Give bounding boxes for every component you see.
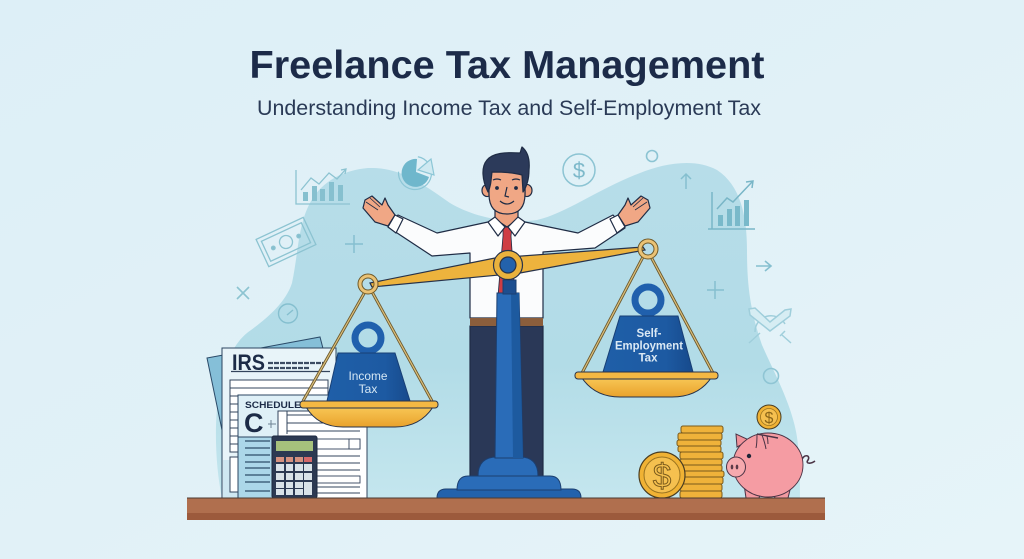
right pan [575, 372, 718, 397]
title: Freelance Tax Management [250, 44, 765, 87]
calculator [272, 436, 317, 498]
trousers [470, 326, 543, 478]
right cuff [610, 215, 625, 233]
left weight: income tax [327, 325, 410, 401]
dome [478, 457, 538, 476]
icon: target check [749, 308, 791, 343]
icon: plus right [707, 281, 724, 299]
icon: line and bar chart right [708, 181, 755, 229]
ear [736, 434, 749, 447]
left fingers [366, 198, 380, 210]
icon: clock circle [278, 304, 298, 323]
middle plinth [457, 476, 561, 490]
right weight: self-employment tax [603, 287, 693, 372]
blue sheet [238, 437, 273, 498]
right weight: self-employment tax: Employment [615, 340, 683, 352]
left ring [360, 276, 376, 292]
face [489, 170, 525, 214]
Schedule C form: SCHEDULE C [245, 400, 311, 411]
icon: small circle top [646, 150, 658, 162]
left pan [300, 401, 438, 427]
icon: plus left [345, 235, 363, 253]
subtitle: Understanding Income Tax and Self-Employment Tax [257, 96, 761, 120]
businessman [363, 147, 650, 478]
icon: pie chart [396, 154, 434, 192]
icon: small circle right [764, 368, 778, 384]
small dollar coin: $ [765, 410, 774, 427]
beam bar [370, 247, 645, 287]
small dollar coin [757, 405, 781, 429]
pole [495, 293, 523, 458]
documents stack [207, 337, 367, 498]
coin slot [757, 434, 778, 438]
right fingers [633, 198, 647, 210]
icon: arrow up [681, 174, 691, 189]
table [187, 498, 825, 520]
snout [726, 457, 746, 477]
left pan strings [303, 290, 432, 401]
hair [483, 147, 529, 192]
pivot [494, 250, 522, 280]
icon: line and bar chart left [296, 169, 350, 204]
eyes and mouth [493, 179, 520, 204]
collar [488, 217, 525, 236]
left hand [363, 196, 395, 226]
large dollar coin [639, 452, 685, 498]
right pan strings [582, 255, 713, 373]
piggy bank [726, 433, 815, 498]
icon: arrow right [756, 261, 771, 271]
coin stack [677, 426, 724, 498]
legs [744, 482, 792, 498]
background blob [216, 163, 800, 498]
neck [495, 206, 518, 227]
label: self-employment tax: Self- [637, 328, 662, 340]
right weight: self-employment tax: Tax [639, 352, 658, 364]
bottom plinth [437, 489, 581, 498]
right hand [618, 196, 650, 226]
tie [498, 227, 515, 296]
right ring [640, 241, 656, 257]
Schedule C form: C [244, 408, 264, 438]
IRS form [222, 348, 336, 498]
ears [482, 184, 532, 197]
left cuff [388, 215, 403, 233]
label: income tax: Income [348, 369, 388, 383]
icon: cross [237, 287, 249, 299]
body [733, 433, 803, 497]
large dollar coin: $ [653, 457, 671, 494]
icon: dollar circle [563, 154, 595, 186]
eye [747, 454, 751, 458]
back blue sheet [207, 337, 326, 430]
icon: dollar circle: $ [573, 158, 585, 183]
Schedule C form [238, 395, 367, 498]
tail [801, 456, 815, 463]
IRS form: IRS [232, 350, 265, 375]
belt [470, 318, 543, 326]
icon: banknote [256, 217, 316, 267]
balance beam [360, 241, 656, 292]
left weight: income tax: Tax [359, 382, 377, 396]
balance stand [437, 280, 581, 498]
shirt and arms [388, 215, 625, 318]
